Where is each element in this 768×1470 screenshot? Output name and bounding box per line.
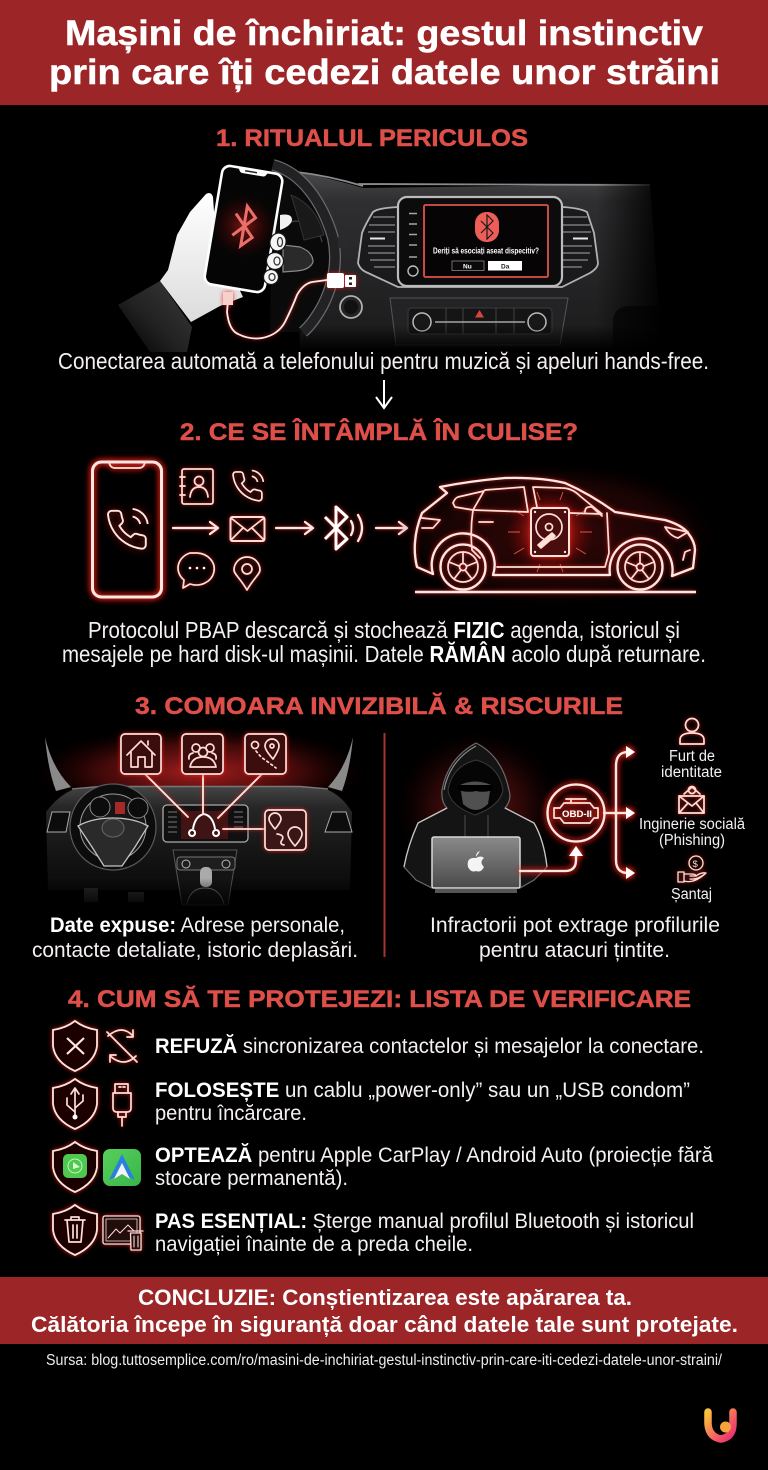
icon box: home <box>121 734 161 774</box>
jacket sleeve <box>118 281 192 352</box>
checklist item: power-only cable: FOLOSEȘTE un cablu „power-only” sau un „USB condom” <box>155 1079 690 1102</box>
source line: Sursa: blog.tuttosemplice.com/ro/masini-de-inchiriat-gestul-instinctiv-prin-care-iti-cedezi-datele-unor-straini/ <box>46 1352 723 1369</box>
fingers <box>262 215 292 286</box>
heading: section 3: 3. COMOARA INVIZIBILĂ & RISCURILE <box>135 692 623 720</box>
infotainment pairing dialog <box>424 205 548 277</box>
car dashboard <box>296 172 664 352</box>
risk: blackmail: Șantaj <box>671 886 712 903</box>
caption: exposed data: contacte detaliate, istoric deplasări. <box>32 938 358 962</box>
checklist item: delete profile <box>53 1205 694 1256</box>
caption: criminals: pentru atacuri țintite. <box>479 938 670 962</box>
icon box: contacts <box>182 734 223 774</box>
checklist item: CarPlay / Android Auto: OPTEAZĂ pentru Apple CarPlay / Android Auto (proiecție fără <box>155 1144 713 1167</box>
checklist item: CarPlay / Android Auto <box>53 1142 713 1192</box>
icon: screen with trash <box>103 1216 143 1250</box>
icon: call in phone <box>108 509 148 549</box>
title banner: Mașini de închiriat: gestul instinctiv <box>65 14 704 53</box>
illustration: phone connected to car dashboard <box>118 165 664 352</box>
caption: section 2 <box>62 617 706 667</box>
car interior <box>35 726 365 910</box>
heading: section 4: 4. CUM SĂ TE PROTEJEZI: LISTA DE VERIFICARE <box>68 985 691 1013</box>
logo <box>708 1412 733 1439</box>
icon: Android Auto <box>103 1149 141 1186</box>
risk: social engineering: (Phishing) <box>659 832 725 849</box>
phone outline <box>92 462 162 597</box>
diagram: data flow phone to car <box>92 462 715 607</box>
icon: contacts book <box>180 469 213 504</box>
risk: blackmail: $ <box>692 859 698 870</box>
risk: social engineering <box>639 786 745 849</box>
icon: location pin <box>234 557 260 590</box>
risk: social engineering: Inginerie socială <box>639 816 745 833</box>
caption: exposed data <box>32 913 358 962</box>
icon box: trips <box>265 810 306 850</box>
icon: shield with x <box>53 1021 97 1071</box>
conclusion banner: CONCLUZIE: Conștientizarea este apărarea ta. <box>138 1285 632 1310</box>
title banner <box>0 0 768 105</box>
title banner: prin care îți cedezi datele unor străini <box>49 53 720 92</box>
car with hard disk <box>395 463 715 607</box>
risk: blackmail <box>671 856 712 903</box>
icon: shield with CarPlay <box>53 1142 97 1192</box>
heading: section 1: 1. RITUALUL PERICULOS <box>216 125 528 152</box>
divider <box>384 733 386 957</box>
icon: chat bubble <box>178 553 214 588</box>
OBD port and risk arrows: OBD-II <box>562 809 592 820</box>
caption: exposed data: Date expuse: Adrese personale, <box>50 913 345 937</box>
infotainment pairing dialog: Deriți să esociați aseat dispecitiv? <box>433 246 539 256</box>
icon: shield with usb <box>53 1079 97 1129</box>
arrow: section 1 to 2 <box>376 380 392 408</box>
checklist item: refuse sync <box>53 1021 704 1071</box>
panel: hacker and risks <box>396 718 745 903</box>
arrows and bluetooth <box>173 507 407 549</box>
hacker illustration <box>396 732 560 893</box>
icon: call history <box>233 470 263 501</box>
icon: sync disabled <box>107 1030 137 1062</box>
risk: identity theft <box>661 718 722 781</box>
conclusion banner <box>0 1277 768 1344</box>
icon box: route history <box>245 734 286 774</box>
caption: section 2: mesajele pe hard disk-ul mașinii. Datele RĂMÂN acolo după returnare. <box>62 640 706 667</box>
infotainment pairing dialog: Da <box>501 264 510 270</box>
icon: usb cable <box>113 1084 131 1126</box>
caption: criminals: Infractorii pot extrage profilurile <box>430 913 720 937</box>
conclusion banner: Călătoria începe în siguranță doar când datele tale sunt protejate. <box>31 1312 738 1337</box>
checklist item: refuse sync: REFUZĂ sincronizarea contactelor și mesajelor la conectare. <box>155 1035 704 1058</box>
risk: identity theft: identitate <box>661 764 722 781</box>
cable and USB plug <box>223 273 356 338</box>
caption: criminals <box>430 913 720 962</box>
icon: envelope <box>230 517 264 541</box>
checklist item: power-only cable <box>53 1079 690 1129</box>
infotainment pairing dialog: Nu <box>463 264 472 270</box>
hand <box>160 193 243 322</box>
heading: section 2: 2. CE SE ÎNTÂMPLĂ ÎN CULISE? <box>180 418 578 446</box>
checklist item: power-only cable: pentru încărcare. <box>155 1102 307 1125</box>
checklist item: delete profile: navigației înainte de a preda cheile. <box>155 1233 473 1256</box>
checklist item: CarPlay / Android Auto: stocare permanentă). <box>155 1167 348 1190</box>
OBD port and risk arrows <box>520 746 635 879</box>
caption: section 2: Protocolul PBAP descarcă și stochează FIZIC agenda, istoricul și <box>88 617 680 643</box>
steering wheel <box>270 165 347 332</box>
connector lines <box>145 774 265 829</box>
checklist item: delete profile: PAS ESENȚIAL: Șterge manual profilul Bluetooth și istoricul <box>155 1210 694 1233</box>
icon: shield with trash <box>53 1205 97 1255</box>
panel: exposed data in car dashboard <box>35 726 365 910</box>
smartphone with bluetooth <box>202 165 285 293</box>
caption: section 1: Conectarea automată a telefonului pentru muzică și apeluri hands-free. <box>58 348 709 374</box>
risk: identity theft: Furt de <box>669 748 715 765</box>
